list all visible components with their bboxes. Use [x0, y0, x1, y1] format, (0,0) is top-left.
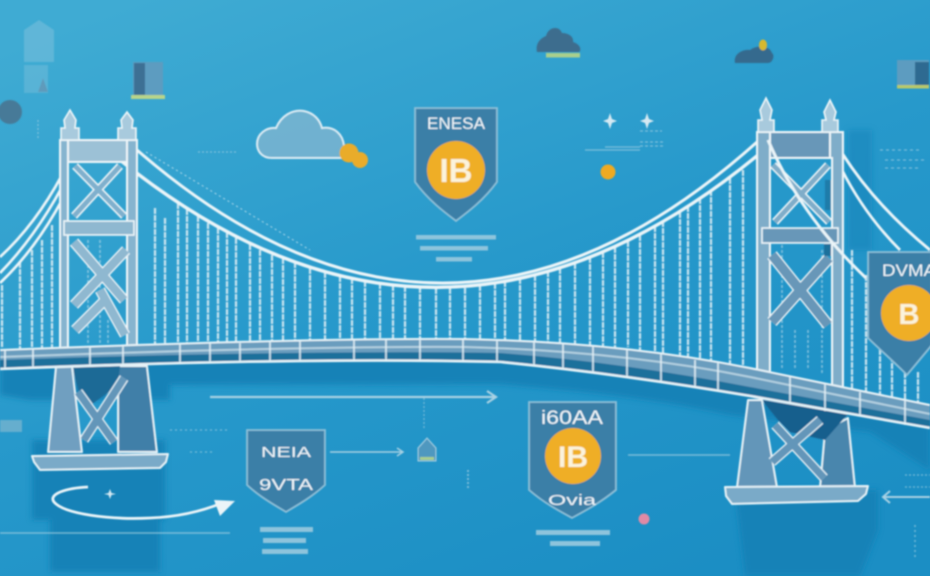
shield: right edge — [868, 252, 930, 375]
right tower lower pier — [725, 400, 868, 504]
cloud with coins — [257, 111, 368, 168]
shield: bottom left: 9VTA — [259, 477, 313, 494]
road deck — [0, 339, 930, 428]
left tower lower pier — [32, 366, 168, 470]
icon: document — [131, 62, 165, 99]
suspension hangers — [2, 170, 918, 405]
right arrow — [883, 491, 930, 503]
faint annotation lines — [0, 120, 930, 560]
dark dot — [0, 100, 22, 124]
left tower — [60, 110, 137, 350]
shield: bottom left — [247, 430, 325, 512]
shield: top centre — [415, 108, 497, 221]
icon: small box below arrow — [418, 438, 436, 461]
small arrow — [330, 448, 403, 456]
right tower finials — [758, 98, 838, 132]
shield: bottom centre: i60AA — [541, 408, 603, 429]
shield: bottom centre: IB — [558, 441, 588, 474]
small blob left of pier — [0, 420, 22, 432]
shield: top centre: IB — [440, 152, 472, 189]
straight arrow upper — [210, 391, 496, 403]
shield: top centre: ENESA — [427, 114, 486, 133]
main cables — [0, 142, 930, 287]
icon: coin on cloud — [735, 40, 773, 63]
faint hangers inside towers — [88, 240, 822, 375]
shield: right edge: DVMA — [882, 261, 930, 280]
pink dot — [638, 514, 650, 524]
icon: bank building — [24, 20, 54, 93]
shield: bottom left: NEIA — [261, 444, 311, 461]
shield: bottom centre — [529, 402, 616, 518]
caption lines — [260, 235, 610, 554]
sparkles — [104, 113, 654, 499]
icon: dark cloud — [537, 28, 580, 58]
shield: bottom centre: Ovia — [548, 492, 597, 509]
curved arrow — [53, 487, 235, 518]
icon: panel right — [897, 60, 929, 88]
water shadows — [0, 130, 930, 576]
coins — [340, 144, 368, 168]
shield: right edge: B — [899, 299, 919, 331]
orange dot — [600, 164, 616, 180]
left tower finials — [61, 110, 136, 140]
right tower — [757, 98, 866, 388]
